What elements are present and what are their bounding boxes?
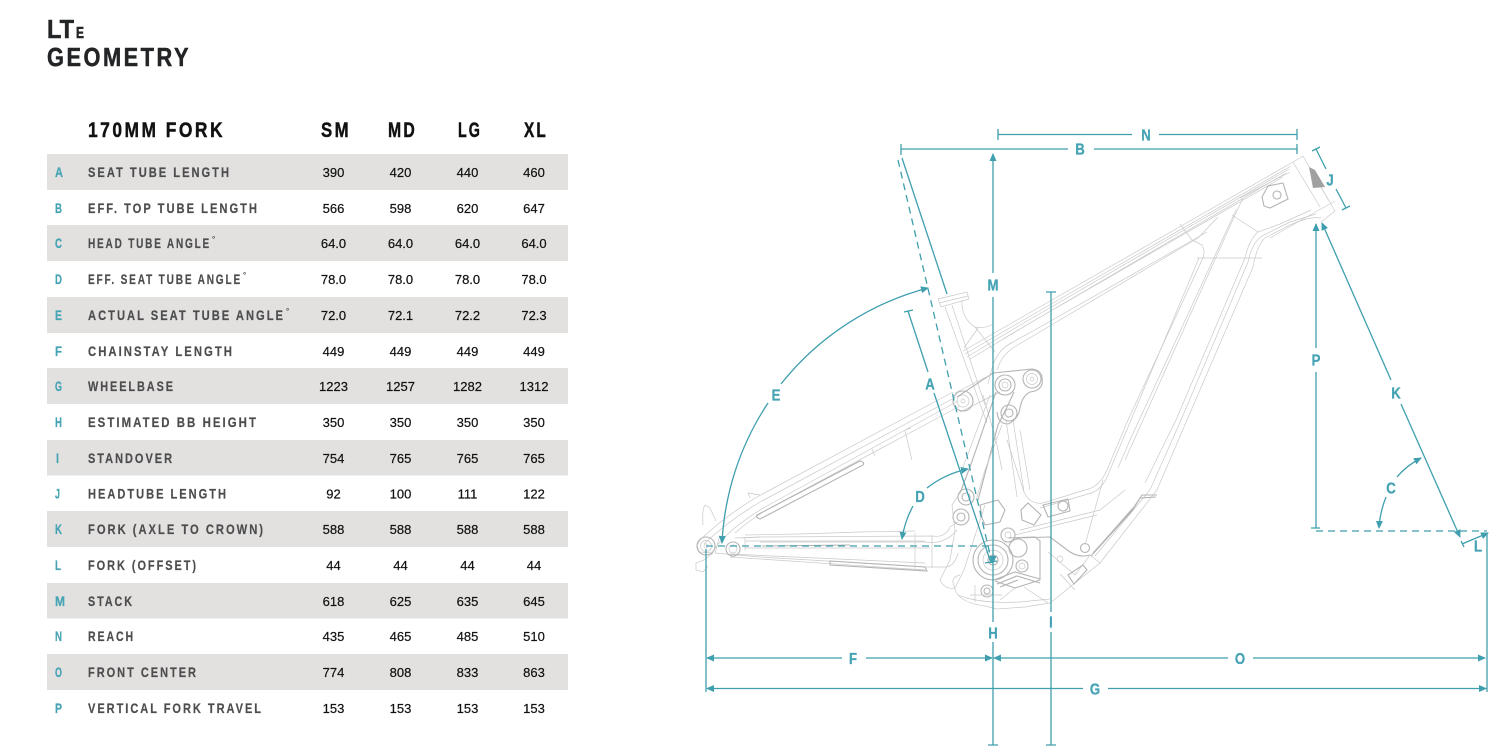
row C: 64.0 — [455, 236, 480, 251]
row L: FORK (OFFSET) — [88, 557, 198, 573]
row N: 435 — [323, 629, 344, 644]
dimension L: L — [1474, 539, 1482, 556]
row K — [47, 511, 568, 547]
row A: 460 — [523, 165, 545, 180]
head tube detail — [1262, 183, 1288, 208]
row H: 350 — [457, 415, 478, 430]
row I: STANDOVER — [88, 450, 174, 466]
row D: D — [55, 271, 62, 287]
row P: P — [55, 700, 62, 716]
seat clamp and seat tube — [938, 292, 969, 307]
row P: 153 — [523, 701, 545, 716]
dimension E arc: E — [772, 388, 781, 405]
row O — [47, 654, 568, 690]
dimension A — [904, 310, 997, 563]
row J: HEADTUBE LENGTH — [88, 486, 228, 502]
row H: 350 — [323, 415, 344, 430]
row O: 774 — [323, 665, 344, 680]
row N: REACH — [88, 628, 135, 644]
row F: 449 — [457, 344, 478, 359]
row P: 153 — [457, 701, 478, 716]
wheelbase extension lines — [706, 533, 1487, 692]
row A: 390 — [323, 165, 344, 180]
row O: FRONT CENTER — [88, 664, 198, 680]
row P: 153 — [390, 701, 411, 716]
table header: LG — [458, 119, 482, 142]
front triangle — [696, 156, 1335, 609]
row A: 440 — [457, 165, 478, 180]
row O: O — [55, 664, 62, 680]
label B: B — [1075, 142, 1085, 159]
row K: 588 — [523, 522, 545, 537]
row G: 1257 — [386, 379, 415, 394]
row B: 647 — [523, 201, 545, 216]
dimension H — [988, 563, 998, 745]
dimension K — [1322, 223, 1460, 537]
lower pivots — [958, 489, 974, 505]
row E: 72.2 — [455, 308, 480, 323]
row C: C — [55, 235, 62, 251]
dimension P: P — [1312, 353, 1321, 370]
row D: 78.0 — [388, 272, 413, 287]
title: LT — [47, 14, 74, 44]
table header — [88, 119, 548, 142]
row P — [55, 700, 545, 716]
row K: K — [55, 521, 62, 537]
row A — [47, 154, 568, 190]
row G — [47, 368, 568, 404]
row E: 72.1 — [388, 308, 413, 323]
row L: 44 — [527, 558, 541, 573]
row E: 72.0 — [321, 308, 346, 323]
row D — [55, 271, 547, 287]
dimension P — [1311, 224, 1321, 528]
row M — [47, 583, 568, 618]
row E: ° — [286, 307, 289, 316]
table header: SM — [321, 119, 351, 142]
row I: 765 — [523, 451, 545, 466]
dimension H: H — [988, 626, 998, 643]
row L — [55, 557, 541, 573]
row C — [47, 225, 568, 261]
row F: 449 — [323, 344, 344, 359]
row M: 645 — [523, 594, 545, 609]
row N: 485 — [457, 629, 478, 644]
row A: 420 — [390, 165, 411, 180]
seat tube reference lines — [706, 158, 993, 563]
row F: F — [55, 343, 62, 359]
row M: STACK — [88, 593, 134, 609]
row B: 566 — [323, 201, 344, 216]
row O: 833 — [457, 665, 478, 680]
dimension C arc — [1316, 458, 1487, 531]
dimension I — [1046, 292, 1056, 745]
row C: HEAD TUBE ANGLE — [88, 235, 211, 251]
dimension D arc: D — [915, 489, 925, 506]
row E: 72.3 — [521, 308, 547, 323]
label N: N — [1141, 128, 1151, 145]
dimension G: G — [1090, 682, 1100, 699]
row N — [55, 628, 545, 644]
row J — [55, 486, 545, 502]
row G: G — [55, 378, 62, 394]
dimension K: K — [1391, 386, 1401, 403]
row D: ° — [243, 271, 246, 280]
row C: 64.0 — [321, 236, 346, 251]
table header: MD — [388, 119, 417, 142]
row N: N — [55, 628, 62, 644]
row G: 1223 — [319, 379, 348, 394]
dimension J: J — [1326, 173, 1334, 190]
table header: 170MM FORK — [88, 119, 225, 142]
row D: EFF. SEAT TUBE ANGLE — [88, 271, 242, 287]
row B: EFF. TOP TUBE LENGTH — [88, 200, 259, 216]
row A: SEAT TUBE LENGTH — [88, 164, 231, 180]
row H: 350 — [390, 415, 411, 430]
row H: ESTIMATED BB HEIGHT — [88, 414, 258, 430]
seat stay — [700, 392, 960, 548]
title: E — [76, 25, 84, 42]
row G: 1282 — [453, 379, 482, 394]
row K: 588 — [457, 522, 478, 537]
row F: 449 — [523, 344, 545, 359]
row K: 588 — [323, 522, 344, 537]
row G: 1312 — [520, 379, 548, 394]
row F: 449 — [390, 344, 411, 359]
row F — [55, 343, 545, 359]
title: GEOMETRY — [47, 42, 191, 72]
dimension F: F — [849, 651, 857, 668]
row M: 618 — [323, 594, 344, 609]
row J: 92 — [326, 486, 341, 502]
row L: L — [55, 557, 61, 573]
row L: 44 — [393, 558, 408, 573]
table: geometry by size — [47, 119, 568, 716]
row E: E — [55, 307, 62, 323]
row H — [55, 414, 545, 430]
row P: VERTICAL FORK TRAVEL — [88, 700, 263, 716]
row D: 78.0 — [321, 272, 346, 287]
row N: 510 — [523, 629, 545, 644]
row P: 153 — [323, 701, 344, 716]
dimension J — [1312, 147, 1350, 210]
chain stay — [743, 522, 958, 542]
row N: 465 — [390, 629, 411, 644]
row O: 863 — [523, 665, 545, 680]
row M: 635 — [457, 594, 478, 609]
bike frame line drawing — [696, 156, 1335, 609]
row J: J — [55, 486, 60, 502]
N line — [998, 129, 1297, 140]
row H: 350 — [523, 415, 545, 430]
rocker link — [957, 369, 1042, 424]
row I — [47, 440, 568, 476]
row I: I — [56, 450, 59, 466]
row C: 64.0 — [521, 236, 547, 251]
dimension C arc: C — [1386, 481, 1396, 498]
row C: 64.0 — [388, 236, 413, 251]
dimension E arc — [722, 288, 928, 543]
row D: 78.0 — [521, 272, 547, 287]
motor and lower housing — [973, 540, 1013, 580]
row M: 625 — [390, 594, 411, 609]
dimension I: I — [1049, 615, 1053, 632]
row B: B — [55, 200, 62, 216]
table header: XL — [524, 119, 548, 142]
row A: A — [55, 164, 63, 180]
row D: 78.0 — [455, 272, 480, 287]
row C: ° — [212, 235, 215, 244]
row B: 598 — [390, 201, 411, 216]
row K: FORK (AXLE TO CROWN) — [88, 521, 265, 537]
row L: 44 — [460, 558, 475, 573]
row G: WHEELBASE — [88, 378, 175, 394]
row I: 754 — [323, 451, 344, 466]
rear dropout — [696, 535, 720, 572]
dimension L — [1461, 533, 1488, 556]
row O: 808 — [390, 665, 411, 680]
row J: 111 — [458, 486, 477, 502]
row B — [55, 200, 545, 216]
row J: 122 — [523, 486, 545, 502]
row L: 44 — [326, 558, 341, 573]
dimension O: O — [1235, 651, 1245, 668]
row M: M — [55, 593, 65, 609]
dimension A: A — [925, 377, 935, 394]
dimension M: M — [988, 278, 999, 295]
dimension B and N: horizontal lines — [901, 128, 1297, 159]
title — [47, 14, 191, 72]
row J: 100 — [390, 486, 411, 502]
row I: 765 — [457, 451, 478, 466]
row E: ACTUAL SEAT TUBE ANGLE — [88, 307, 285, 323]
row H: H — [55, 414, 62, 430]
row I: 765 — [390, 451, 411, 466]
row K: 588 — [390, 522, 411, 537]
row E — [47, 297, 568, 333]
row F: CHAINSTAY LENGTH — [88, 343, 234, 359]
row B: 620 — [457, 201, 478, 216]
dimension D arc — [902, 469, 968, 539]
B line — [901, 144, 1297, 155]
